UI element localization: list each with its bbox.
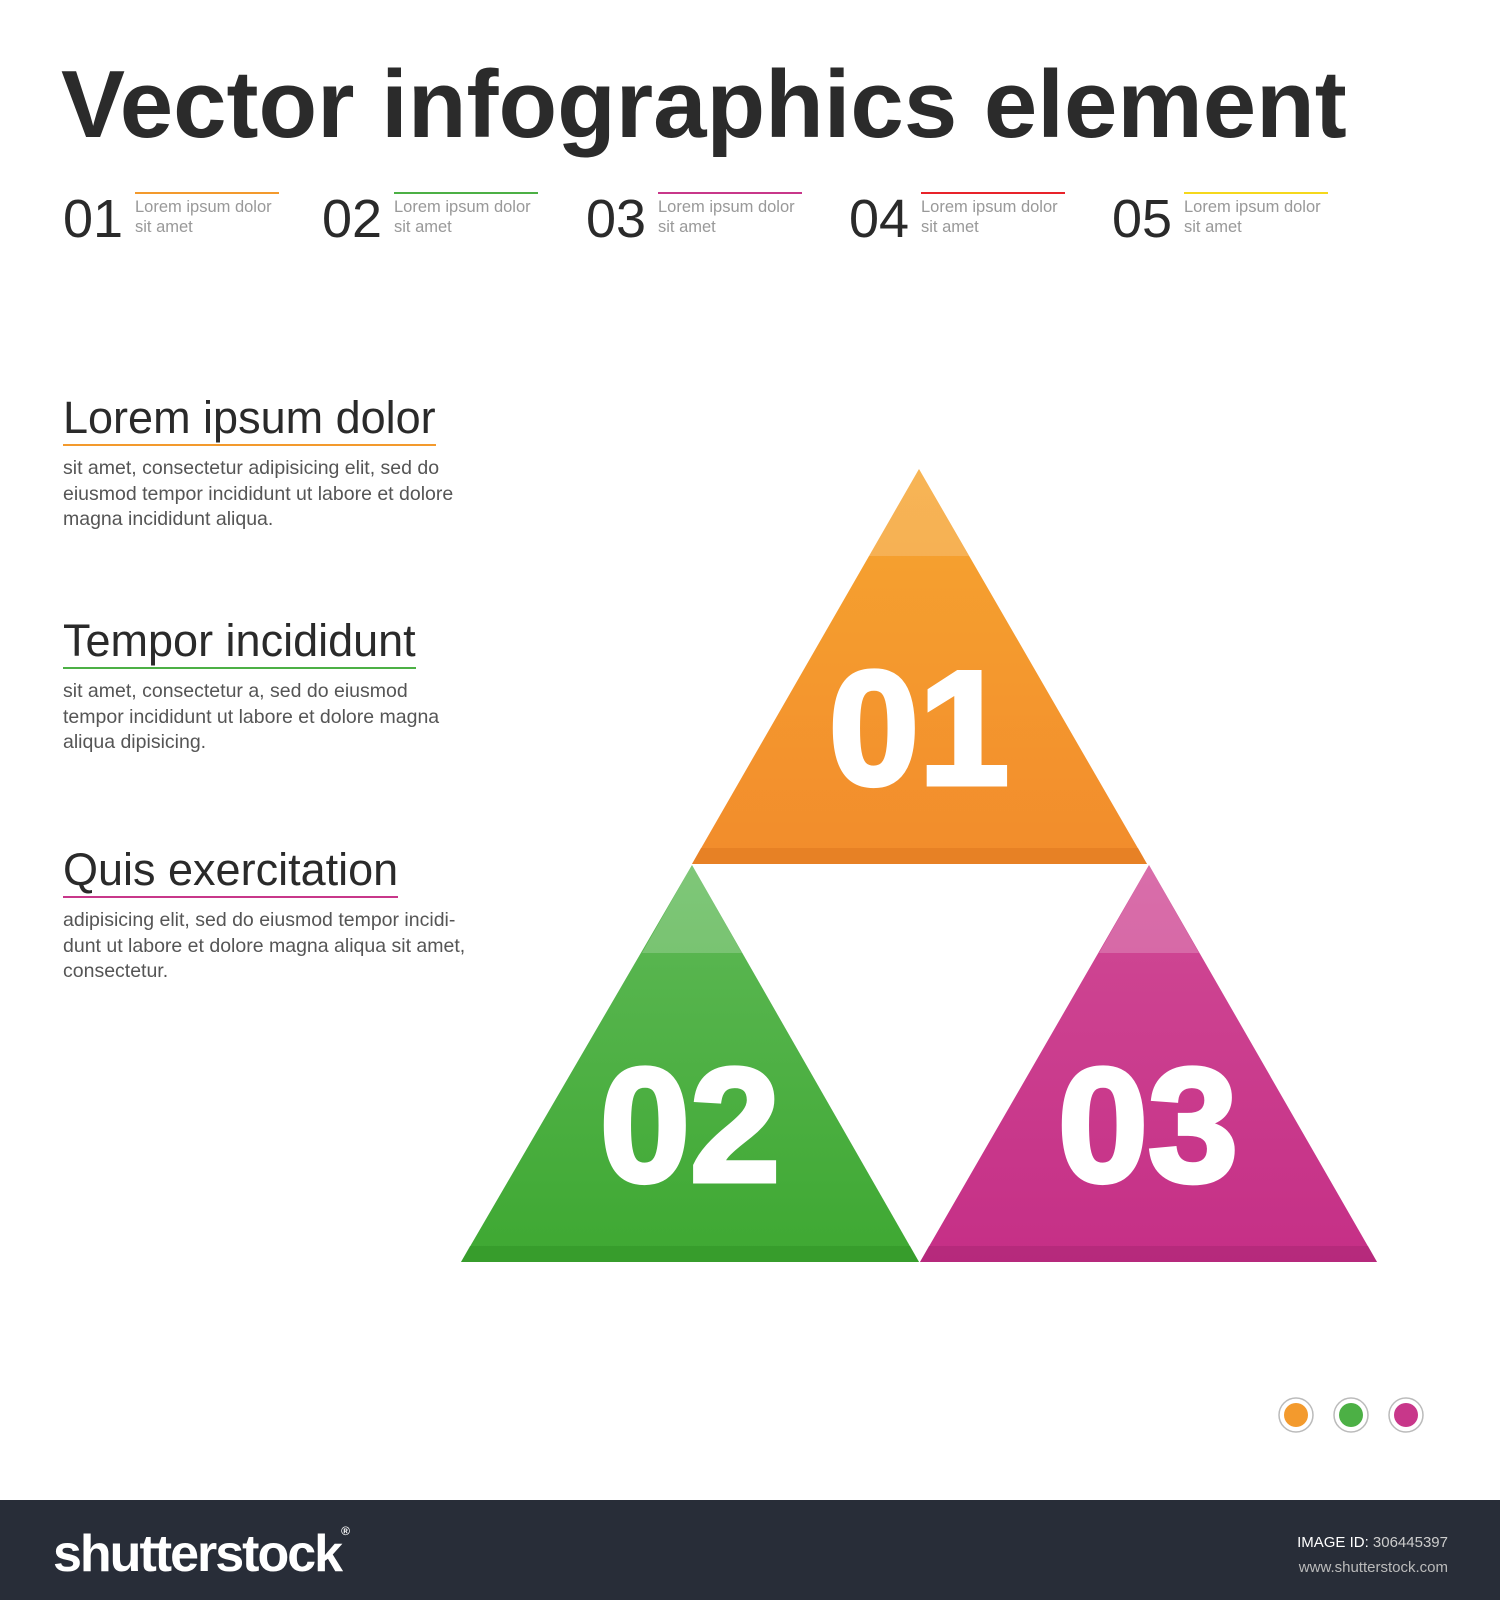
item 02 bbox=[322, 189, 538, 249]
item 03: Lorem ipsum dolor sit amet bbox=[658, 198, 795, 236]
section: Tempor incididunt bbox=[63, 615, 440, 753]
footer logo: shutterstock® bbox=[53, 1524, 348, 1583]
section: Tempor incididunt: sit amet, consectetur a, sed do eiusmod bbox=[63, 680, 408, 702]
section: Lorem ipsum dolor: eiusmod tempor incididunt ut labore et dolore bbox=[63, 482, 453, 504]
item 03: 03 bbox=[586, 189, 646, 249]
item 02: Lorem ipsum dolor sit amet bbox=[394, 198, 531, 236]
triangle 02: 02 bbox=[600, 1035, 780, 1216]
triangle 01 bbox=[692, 469, 1147, 864]
item 05 bbox=[1112, 189, 1328, 249]
triangle 03: 03 bbox=[1058, 1035, 1238, 1216]
section: Lorem ipsum dolor: Lorem ipsum dolor bbox=[63, 392, 436, 443]
section: Tempor incididunt: aliqua dipisicing. bbox=[63, 731, 206, 753]
section: Lorem ipsum dolor bbox=[63, 392, 453, 530]
section: Tempor incididunt: tempor incididunt ut labore et dolore magna bbox=[63, 706, 439, 728]
footer bar bbox=[0, 1500, 1500, 1600]
section: Lorem ipsum dolor: magna incididunt aliqua. bbox=[63, 508, 273, 530]
triangle 03 bbox=[920, 865, 1377, 1262]
item 01: 01 bbox=[63, 189, 123, 249]
item 03 bbox=[586, 189, 802, 249]
item 05: Lorem ipsum dolor sit amet bbox=[1184, 198, 1321, 236]
section: Quis exercitation: adipisicing elit, sed do eiusmod tempor incidi- bbox=[63, 909, 455, 931]
item 05: 05 bbox=[1112, 189, 1172, 249]
section: Quis exercitation: Quis exercitation bbox=[63, 844, 398, 895]
section: Quis exercitation: dunt ut labore et dolore magna aliqua sit amet, bbox=[63, 934, 465, 956]
item 01 bbox=[63, 189, 279, 249]
section: Tempor incididunt: Tempor incididunt bbox=[63, 615, 416, 666]
image id: IMAGE ID: 306445397 bbox=[1297, 1534, 1448, 1551]
item 04: 04 bbox=[849, 189, 909, 249]
item 01: Lorem ipsum dolor sit amet bbox=[135, 198, 272, 236]
image id: www.shutterstock.com bbox=[1299, 1559, 1448, 1576]
item 04 bbox=[849, 189, 1065, 249]
item 04: Lorem ipsum dolor sit amet bbox=[921, 198, 1058, 236]
section: Quis exercitation: consectetur. bbox=[63, 960, 168, 982]
color dots bbox=[1279, 1398, 1423, 1432]
image id bbox=[1297, 1534, 1448, 1576]
section: Quis exercitation bbox=[63, 844, 465, 982]
numbered legend row bbox=[63, 189, 1328, 249]
triangle 02 bbox=[461, 865, 919, 1262]
item 02: 02 bbox=[322, 189, 382, 249]
section: Lorem ipsum dolor: sit amet, consectetur adipisicing elit, sed do bbox=[63, 457, 439, 479]
triangle 01: 01 bbox=[829, 638, 1009, 819]
title: Vector infographics element bbox=[61, 51, 1347, 158]
